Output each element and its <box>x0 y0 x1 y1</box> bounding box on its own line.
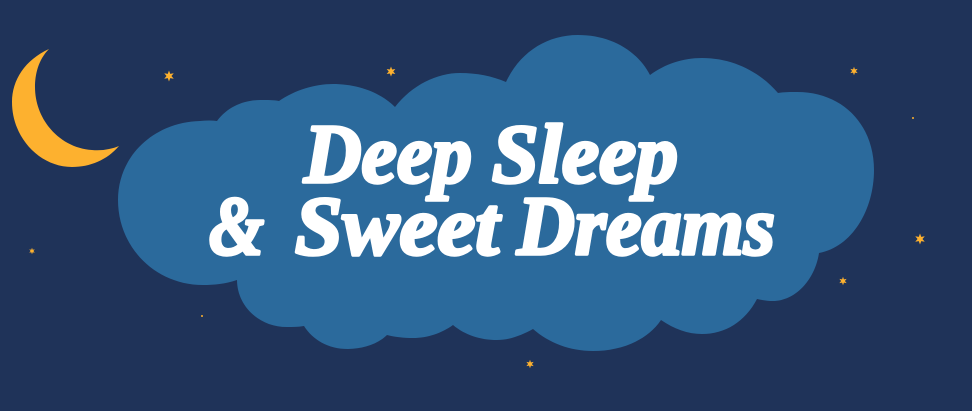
stars <box>29 66 925 368</box>
star <box>29 248 35 254</box>
title word: Deep: Deep <box>303 108 472 201</box>
star <box>839 277 847 285</box>
star <box>164 70 174 82</box>
title word: Sleep: Sleep <box>492 108 678 201</box>
small star <box>201 315 203 317</box>
title word: Dreams: Dreams <box>516 180 775 273</box>
star <box>850 67 858 75</box>
star <box>526 360 534 368</box>
icon: crescent moon <box>12 49 119 167</box>
star <box>387 66 395 76</box>
star <box>915 234 925 244</box>
cloud <box>118 35 874 351</box>
title word: ampersand: & <box>209 180 264 273</box>
title: Deep Sleep & Sweet Dreams <box>209 108 775 273</box>
small star <box>912 117 914 119</box>
title word: Sweet: Sweet <box>295 180 502 273</box>
